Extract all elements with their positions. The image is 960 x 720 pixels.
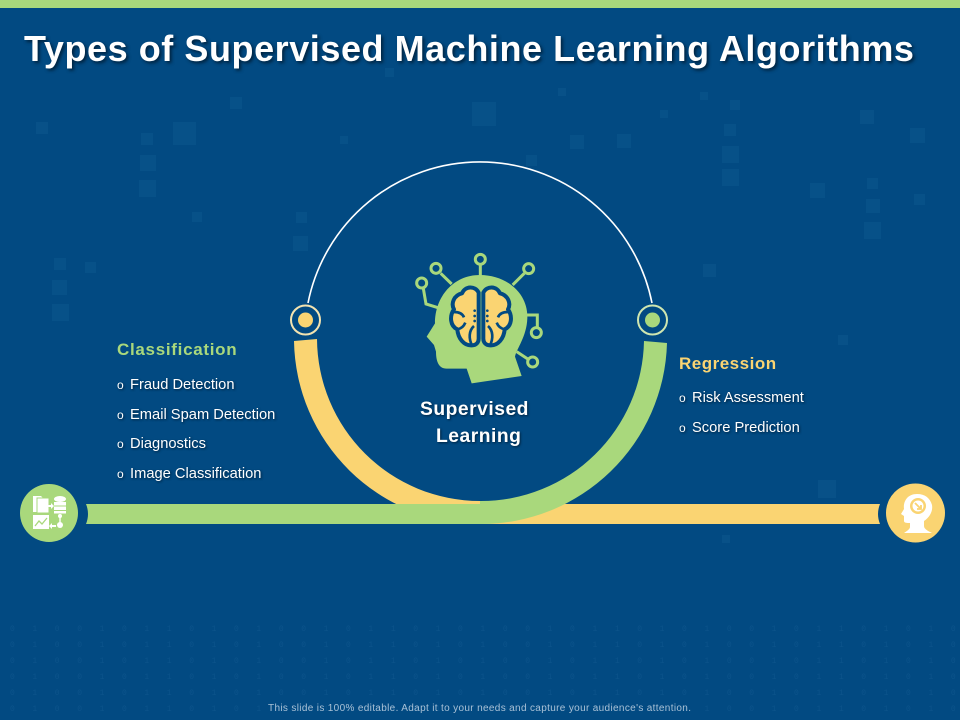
left node	[291, 306, 320, 334]
top accent bar	[0, 0, 960, 8]
heading: Supervised Learning: Learning	[436, 426, 521, 447]
list item: Image Classification	[130, 466, 261, 482]
icon: head circle	[886, 484, 945, 542]
heading: Supervised Learning: Supervised	[420, 399, 529, 420]
heading: regression: Regression	[679, 354, 777, 373]
list item: Fraud Detection	[130, 377, 234, 393]
title: Types of Supervised Machine Learning Algorithms	[24, 28, 914, 69]
list item: o	[117, 437, 124, 451]
list item: Risk Assessment	[692, 390, 804, 406]
list item: Diagnostics	[130, 436, 206, 452]
list item: o	[679, 421, 686, 435]
heading: classification: Classification	[117, 340, 237, 359]
list item: Score Prediction	[692, 420, 800, 436]
panel: classification	[117, 340, 276, 483]
icon: head with brain and circuits	[417, 254, 541, 383]
white arc	[308, 162, 652, 303]
list item: o	[117, 408, 124, 422]
list item: Email Spam Detection	[130, 407, 275, 423]
list item: o	[117, 467, 124, 481]
icon: data circle	[20, 484, 78, 542]
right node	[638, 306, 667, 334]
list item: o	[117, 378, 124, 392]
panel: regression	[679, 354, 806, 436]
green arc right	[480, 341, 667, 524]
yellow arc left	[294, 339, 480, 524]
green bar to the left	[86, 504, 480, 524]
footer note: This slide is 100% editable. Adapt it to your needs and capture your audience's attention.	[268, 703, 691, 714]
yellow bar to the right	[480, 504, 880, 524]
heading: Supervised Learning	[420, 399, 530, 448]
list item: o	[679, 391, 686, 405]
